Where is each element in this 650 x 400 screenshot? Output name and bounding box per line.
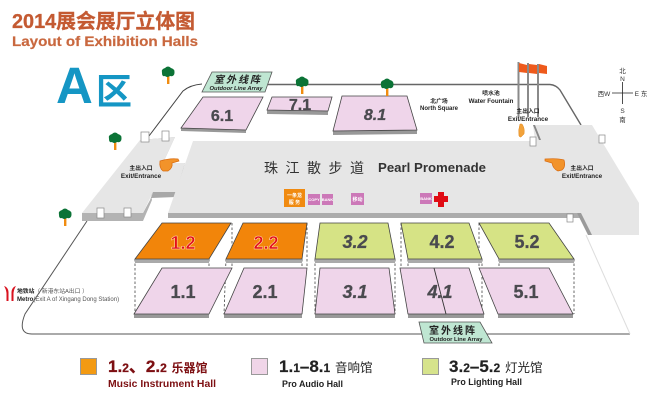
hall 3.1: 3.1 <box>342 282 368 302</box>
hall 2.1 <box>224 268 307 318</box>
hall 2.2 <box>226 223 307 263</box>
banner: outdoor line array north: Outdoor Line Array <box>210 86 263 92</box>
hall 1.2 <box>135 223 231 263</box>
banner: outdoor line array north <box>202 72 272 92</box>
compass: 西W <box>598 90 611 98</box>
label: north square <box>420 97 459 112</box>
zone label <box>56 57 132 114</box>
labels: east exit: 主出入口 <box>570 164 594 172</box>
site boundary road <box>22 84 630 334</box>
label: water fountain <box>469 89 514 105</box>
service icons <box>284 189 432 207</box>
service icons: BANK <box>322 197 333 202</box>
service icons: 一条龙 <box>287 192 302 199</box>
labels: east exit: Exit/Entrance <box>562 173 603 180</box>
labels: north exit: 主出入口 <box>516 107 540 115</box>
chinese title: 2014展会展厅立体图 <box>12 9 195 33</box>
compass: E 东 <box>635 89 648 98</box>
hall 5.2: 5.2 <box>514 232 540 252</box>
hall 1.2: 1.2 <box>170 233 196 253</box>
service icons: 移动 <box>352 196 363 203</box>
labels: west exit <box>121 164 162 180</box>
icon: metro logo <box>4 286 16 301</box>
icon: first aid cross <box>434 192 448 207</box>
hall 4.2 <box>401 223 482 263</box>
labels: north exit: Exit/Entrance <box>508 116 549 123</box>
dashed hall connectors <box>135 223 574 314</box>
hall 2.1: 2.1 <box>252 282 278 302</box>
compass: 南 <box>619 115 626 124</box>
legend: music instrument hall: Music Instrument Hall <box>108 379 216 390</box>
hall 7.1: 7.1 <box>289 97 311 114</box>
metro station label: Metro(Exit A of Xingang Dong Station) <box>17 297 119 303</box>
label: north square: 北广场 <box>430 97 448 105</box>
icon: north entrance gate strip <box>533 125 541 140</box>
zone label: A <box>56 57 93 114</box>
icon: pointing hand west <box>160 159 179 171</box>
hall 5.1: 5.1 <box>513 282 539 302</box>
small door markers <box>97 131 605 222</box>
title <box>12 9 198 49</box>
labels: east exit <box>562 164 603 180</box>
hall 6.1: 6.1 <box>211 108 233 125</box>
hall 3.2 <box>315 223 395 263</box>
label: water fountain: 喷水池 <box>482 89 500 97</box>
legend: music instrument hall: 1.2、2.2 乐器馆 <box>108 357 208 376</box>
metro station label <box>4 286 119 303</box>
banner: outdoor line array south: 室外线阵 <box>429 324 477 337</box>
icon: pointing hand east <box>545 159 565 171</box>
icon: pointing hand north <box>519 124 524 137</box>
promenade label: Pearl Promenade <box>378 161 486 175</box>
legend: pro audio hall: Pro Audio Hall <box>282 379 343 389</box>
hall 1.1: 1.1 <box>170 282 196 302</box>
hall 6.1 <box>181 97 263 133</box>
label: water fountain: Water Fountain <box>469 98 514 105</box>
compass: S <box>620 108 625 115</box>
promenade label <box>264 160 486 176</box>
legend: pro lighting hall: 3.2–5.2 灯光馆 <box>449 357 542 376</box>
legend: pro lighting hall: Pro Lighting Hall <box>451 377 522 387</box>
banner: outdoor line array south: Outdoor Line Array <box>430 337 483 343</box>
labels: west exit: 主出入口 <box>129 164 153 172</box>
service icons: COPY <box>308 197 320 202</box>
hall 8.1: 8.1 <box>364 107 386 124</box>
promenade label: 珠江散步道 <box>264 160 372 176</box>
hall 3.2: 3.2 <box>342 232 368 252</box>
labels: north exit <box>508 107 549 123</box>
hall 7.1 <box>267 97 332 115</box>
west plaza <box>82 137 185 221</box>
hall 2.2: 2.2 <box>253 233 279 253</box>
labels: west exit: Exit/Entrance <box>121 173 162 180</box>
hall 5.2 <box>479 223 574 263</box>
compass: 北 <box>619 67 626 75</box>
compass: N <box>620 76 625 83</box>
metro station label: 地铁站（ 新港东站A出口 ） <box>17 287 88 295</box>
hall 5.1 <box>479 268 573 318</box>
hall 3.1 <box>315 268 395 318</box>
label: north square: North Square <box>420 106 459 112</box>
hall 4.1 <box>400 268 484 318</box>
hall 4.2: 4.2 <box>429 232 455 252</box>
service icons: 服 务 <box>289 199 300 206</box>
zone label: 区 <box>96 71 132 112</box>
compass <box>598 67 648 124</box>
banner: outdoor line array south <box>419 322 492 343</box>
hall 1.1 <box>134 268 232 318</box>
english subtitle: Layout of Exhibition Halls <box>12 33 198 49</box>
hall 8.1 <box>333 96 417 135</box>
promenade building <box>168 125 639 235</box>
legend: pro audio hall <box>252 357 372 389</box>
trees <box>59 66 394 226</box>
legend: pro audio hall: 1.1–8.1 音响馆 <box>279 357 372 376</box>
banner: outdoor line array north: 室外线阵 <box>214 74 262 86</box>
legend: pro lighting hall <box>422 357 542 387</box>
legend: music instrument hall <box>80 357 216 390</box>
flags <box>518 62 547 117</box>
service icons: BANK <box>420 196 432 201</box>
hall 4.1: 4.1 <box>426 282 453 302</box>
